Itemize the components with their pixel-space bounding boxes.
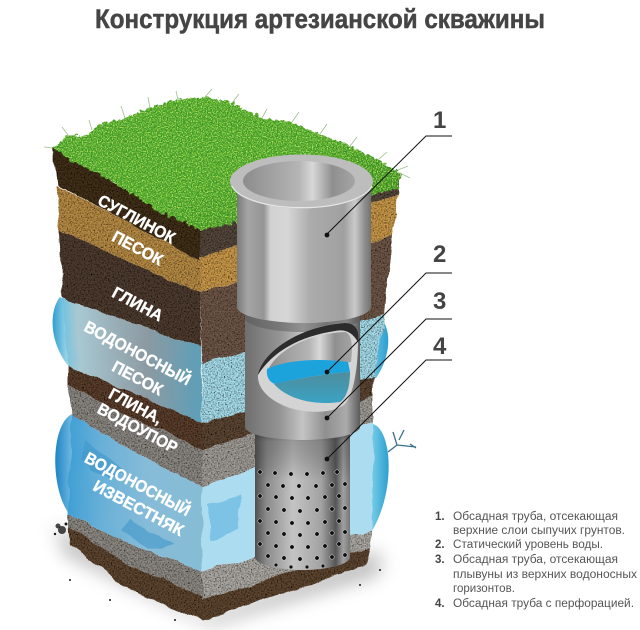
layer: grey right [202, 397, 373, 487]
layer: clay right [200, 237, 393, 363]
layer: brown base right [202, 547, 370, 620]
layer: aquifer limestone left [68, 415, 202, 570]
callout 3: 3 [433, 288, 446, 315]
label: clay: ГЛИНА [109, 284, 166, 325]
legend item 1: Обсадная труба, отсекающая [453, 511, 618, 523]
legend item 3 [435, 554, 637, 595]
well casing assembly [230, 154, 373, 570]
callout 2 [325, 241, 452, 374]
layer: aquifer right [202, 423, 373, 570]
legend item 3: плывуны из верхних водоносных [453, 569, 637, 581]
label: loam: СУГЛИНОК [95, 192, 179, 248]
legend item 2: Статический уровень воды. [453, 539, 603, 551]
layer: topsoil right [200, 173, 400, 257]
flange lip highlight [232, 186, 372, 208]
perforation holes [258, 470, 347, 569]
label: water-bearing sand: ВОДОНОСНЫЙ [81, 317, 194, 389]
legend item 1 [435, 511, 625, 537]
layer: grey base right [202, 530, 372, 600]
pipe 1: upper casing [230, 154, 373, 323]
callout 1: 1 [433, 107, 446, 134]
legend item 1: 1. [435, 511, 445, 523]
layer: grey base left [68, 513, 202, 597]
layer: brown right [202, 377, 374, 450]
inner back wall [267, 332, 352, 372]
layer: water sand left [62, 297, 202, 423]
flange [230, 154, 373, 208]
left face soil layers [53, 148, 202, 620]
grass top [44, 89, 410, 230]
ground shadow [55, 525, 380, 626]
layer: loam sand left [56, 185, 200, 293]
cutout rim [258, 323, 358, 412]
legend item 2: 2. [435, 539, 445, 551]
debris specks [54, 522, 381, 621]
label: limestone: ИЗВЕСТНЯК [90, 477, 188, 540]
water below level [274, 372, 350, 403]
layer: grey aquitard left [68, 385, 202, 487]
label: sand: ПЕСОК [109, 228, 167, 270]
label: clay aquitard: ГЛИНА, [106, 385, 165, 428]
left face water layers [62, 297, 202, 570]
aquifer streaks left [80, 440, 175, 550]
legend item 1: верхние слои сыпучих грунтов. [453, 525, 625, 537]
label: water-bearing sand 2: ПЕСОК [109, 358, 167, 400]
shadow under upper casing [245, 305, 360, 332]
title: Конструкция артезианской скважины [95, 4, 545, 34]
right face layers [200, 173, 400, 620]
legend item 3: Обсадная труба, отсекающая [453, 554, 618, 566]
legend item 3: 3. [435, 554, 445, 566]
cutout dark edge [258, 323, 358, 375]
layer: brown base left [68, 527, 202, 620]
grass blades [44, 89, 410, 178]
pipe 4: perforated casing [255, 425, 350, 570]
pipe 3: middle casing with cutout [245, 300, 360, 440]
layer: brown aquitard left [68, 367, 202, 450]
left water bulges [53, 297, 110, 530]
layer: water right [202, 315, 385, 423]
callout 3 [325, 288, 452, 420]
inner bore [243, 161, 355, 201]
legend item 3: горизонтов. [453, 583, 515, 595]
legend item 4: 4. [435, 598, 445, 610]
soil block cutaway [44, 89, 410, 620]
legend item 4: Обсадная труба с перфорацией. [453, 598, 634, 610]
right water bulges [330, 316, 389, 540]
layer: topsoil left [53, 148, 200, 260]
label: aquitard: ВОДОУПОР [94, 400, 180, 457]
callout 1 [325, 107, 452, 237]
legend [435, 511, 637, 610]
label: aquifer limestone: ВОДОНОСНЫЙ [81, 448, 194, 520]
callout 4 [325, 333, 452, 461]
layer: sand right [200, 195, 398, 293]
layer: clay left [60, 230, 201, 347]
water splash [388, 430, 416, 452]
callout 2: 2 [433, 241, 446, 268]
callout 4: 4 [433, 333, 447, 360]
layer labels [81, 192, 194, 540]
static water level [267, 360, 350, 384]
